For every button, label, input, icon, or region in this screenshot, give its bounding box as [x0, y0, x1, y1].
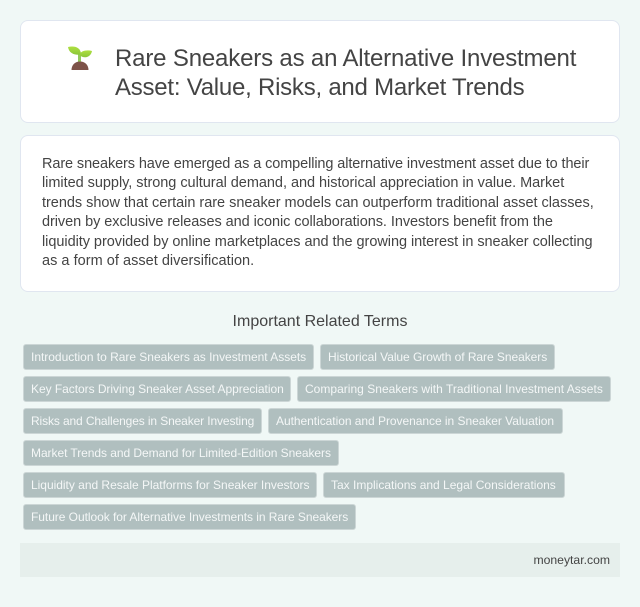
- panel: related term tags: [23, 344, 611, 530]
- tag: Market Trends and Demand for Limited-Edition Sneakers: [31, 446, 331, 460]
- heading: important related terms: Important Related Terms: [233, 313, 407, 330]
- tag: [23, 504, 356, 530]
- icon: seedling: [68, 46, 92, 70]
- tag: Introduction to Rare Sneakers as Investment Assets: [31, 350, 306, 364]
- text block: summary: as a form of asset diversification.: [42, 253, 254, 269]
- tag: [320, 344, 555, 370]
- tag: [23, 376, 291, 402]
- tag: [23, 408, 262, 434]
- text block: summary: limited supply, strong cultural demand, and historical appreciation in value. Market: [42, 175, 564, 191]
- tag: [23, 472, 317, 498]
- tag: [23, 440, 339, 466]
- tag: Future Outlook for Alternative Investments in Rare Sneakers: [31, 510, 348, 524]
- panel: header: [20, 20, 620, 123]
- tag: Historical Value Growth of Rare Sneakers: [328, 350, 547, 364]
- title: [115, 45, 576, 101]
- panel: summary text: [20, 135, 620, 292]
- tag: Liquidity and Resale Platforms for Sneaker Investors: [31, 478, 309, 492]
- text block: summary: liquidity provided by online marketplaces and the growing interest in sneaker collecting: [42, 234, 593, 250]
- tag: [323, 472, 565, 498]
- text block: summary: [42, 156, 594, 269]
- text block: summary: driven by exclusive releases and iconic collaborations. Investors benefit from the: [42, 214, 553, 230]
- text block: summary: Rare sneakers have emerged as a compelling alternative investment asset due to their: [42, 156, 589, 172]
- title: Asset: Value, Risks, and Market Trends: [115, 74, 524, 101]
- tag: Risks and Challenges in Sneaker Investing: [31, 414, 254, 428]
- tag: [23, 344, 314, 370]
- footer source text: moneytar.com: [533, 553, 610, 567]
- title: Rare Sneakers as an Alternative Investment: [115, 45, 576, 72]
- tag: [297, 376, 611, 402]
- tag: Tax Implications and Legal Considerations: [331, 478, 556, 492]
- tag: [268, 408, 563, 434]
- footer: [20, 543, 620, 577]
- tag: Comparing Sneakers with Traditional Investment Assets: [305, 382, 603, 396]
- tag: Authentication and Provenance in Sneaker Valuation: [276, 414, 554, 428]
- text block: summary: trends show that certain rare sneaker models can outperform traditional asset classes,: [42, 195, 594, 211]
- tag: Key Factors Driving Sneaker Asset Appreciation: [31, 382, 284, 396]
